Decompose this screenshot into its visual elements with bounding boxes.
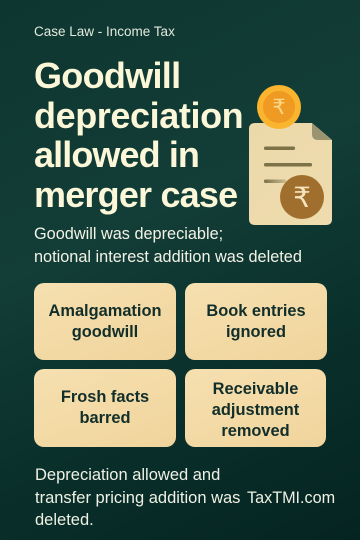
document sheet [249,123,332,225]
watermark: site name: TaxTMI.com [247,488,335,506]
card: frosh facts barred: barred [79,409,130,427]
conclusion text: deleted. [35,511,94,529]
card: receivable adjustment removed: Receivable [213,380,298,398]
subtitle [34,225,302,266]
card: receivable adjustment removed [185,369,326,447]
conclusion text: transfer pricing addition was [35,488,240,506]
card: amalgamation goodwill: Amalgamation [49,302,161,320]
card: book entries ignored: Book entries [206,302,306,320]
conclusion text [35,466,240,529]
icon: brown rupee coin [280,175,324,219]
card: frosh facts barred [34,369,176,447]
card: amalgamation goodwill: goodwill [72,322,138,340]
card: book entries ignored [185,283,327,360]
title: depreciation [34,94,243,136]
icon: gold rupee coin: ₹ [272,96,286,119]
icon: document with rupee coins [249,85,332,225]
card: frosh facts barred: Frosh facts [61,388,149,406]
subtitle: Goodwill was depreciable; [34,225,223,243]
title: Goodwill [34,55,180,96]
eyebrow: category label: Case Law - Income Tax [34,24,175,39]
title [34,55,243,214]
card: book entries ignored: ignored [226,322,286,340]
card: receivable adjustment removed: removed [221,422,290,440]
icon: gold rupee coin [257,85,301,129]
subtitle: notional interest addition was deleted [34,248,302,266]
title: merger case [34,174,237,214]
title: allowed in [34,134,199,175]
conclusion text: Depreciation allowed and [35,466,220,484]
card: receivable adjustment removed: adjustment [212,400,299,418]
card: amalgamation goodwill [34,283,176,360]
icon: brown rupee coin: ₹ [293,182,311,213]
